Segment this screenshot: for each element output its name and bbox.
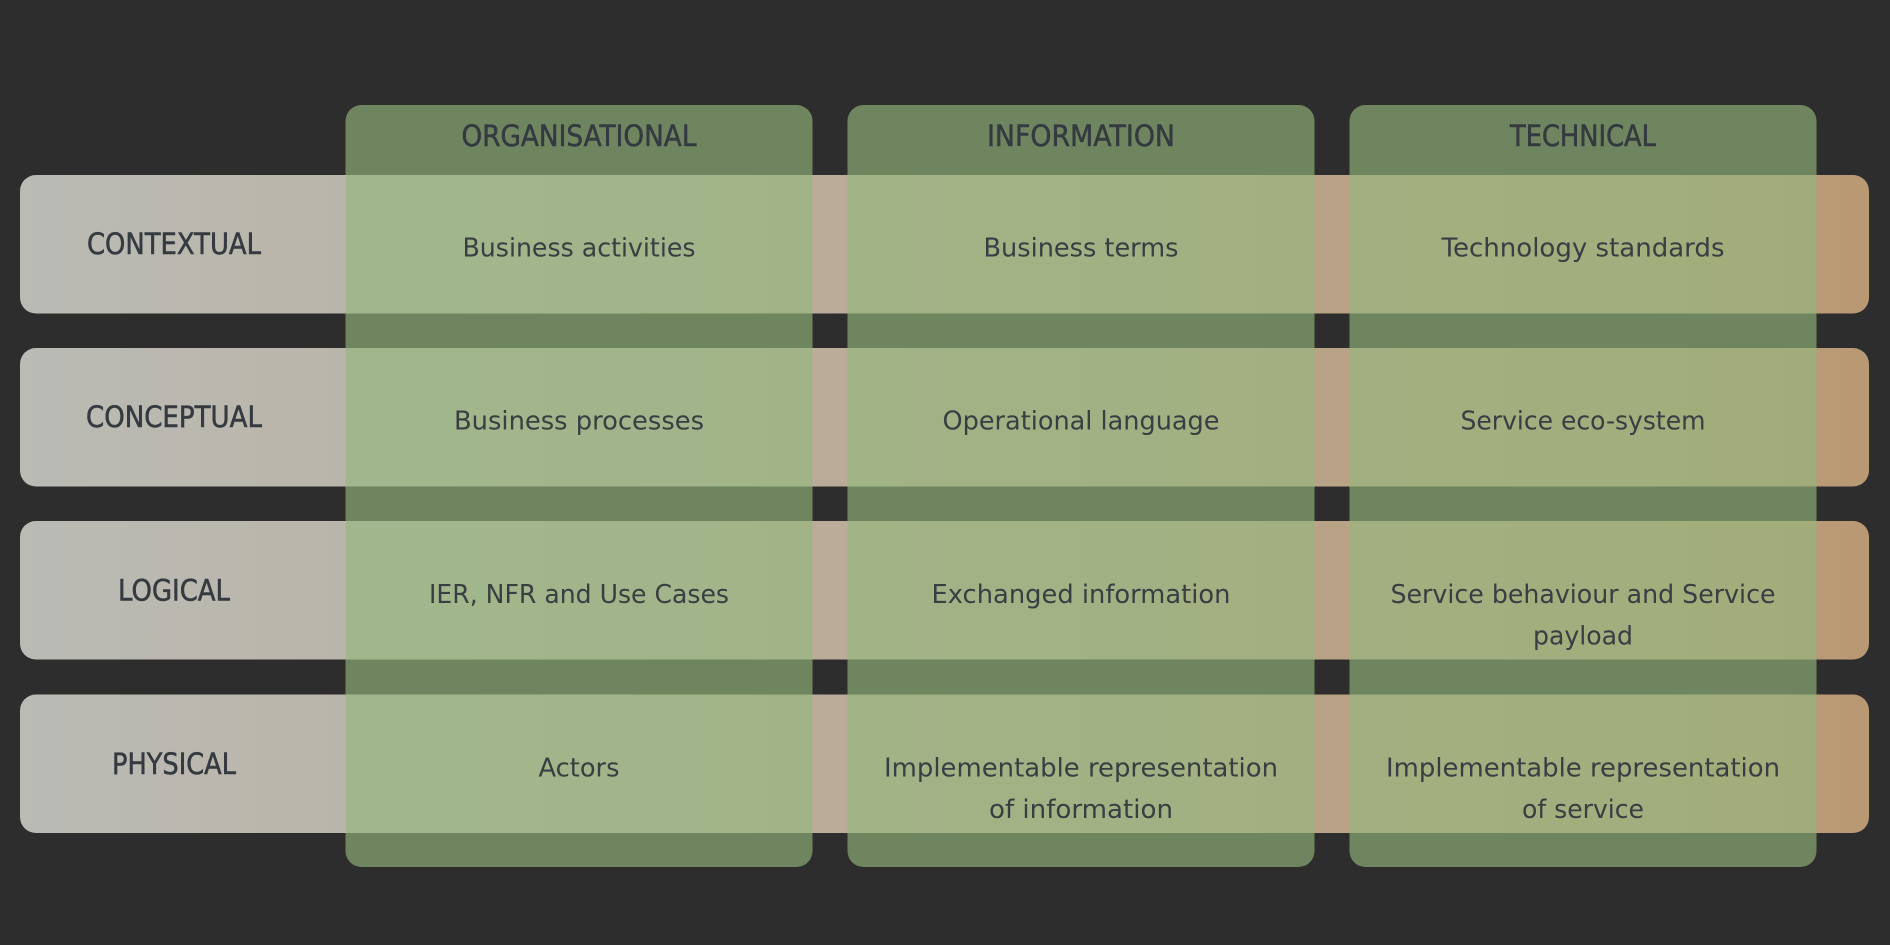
column band: organisational xyxy=(346,105,812,867)
cell: logical technical xyxy=(1390,580,1776,652)
row heading: logical: LOGICAL xyxy=(118,574,230,608)
cell: contextual information: Business terms xyxy=(984,234,1178,264)
cell: physical technical: of service xyxy=(1522,795,1644,825)
cell: contextual organisational: Business activities xyxy=(462,234,696,264)
row band: contextual xyxy=(20,175,1869,314)
column band: technical xyxy=(1350,105,1816,867)
cell: logical technical: Service behaviour and Service xyxy=(1390,580,1776,610)
cell: contextual technical: Technology standards xyxy=(1440,234,1724,264)
row band: logical xyxy=(20,521,1869,660)
column heading: organisational: ORGANISATIONAL xyxy=(462,119,696,153)
cell: physical information: Implementable representation xyxy=(884,754,1278,784)
cell: logical technical: payload xyxy=(1533,622,1633,652)
column heading: information: INFORMATION xyxy=(987,119,1175,153)
cell: physical information: of information xyxy=(989,795,1173,825)
cell: conceptual information: Operational language xyxy=(942,406,1220,436)
cell: physical technical: Implementable representation xyxy=(1386,754,1780,784)
cell: physical information xyxy=(884,754,1278,825)
cell: physical organisational: Actors xyxy=(538,754,620,784)
row heading: physical: PHYSICAL xyxy=(112,747,236,781)
row heading: contextual: CONTEXTUAL xyxy=(87,227,261,261)
cell: conceptual organisational: Business processes xyxy=(454,406,704,436)
cell: logical organisational: IER, NFR and Use Cases xyxy=(429,580,729,610)
row band: conceptual xyxy=(20,348,1869,486)
cell: physical technical xyxy=(1386,754,1780,825)
column heading: technical: TECHNICAL xyxy=(1509,119,1656,153)
row band: physical xyxy=(20,694,1869,833)
cell: conceptual technical: Service eco-system xyxy=(1460,406,1706,436)
column band: information xyxy=(848,105,1314,867)
cell: logical information: Exchanged information xyxy=(932,580,1230,610)
row heading: conceptual: CONCEPTUAL xyxy=(86,400,262,434)
